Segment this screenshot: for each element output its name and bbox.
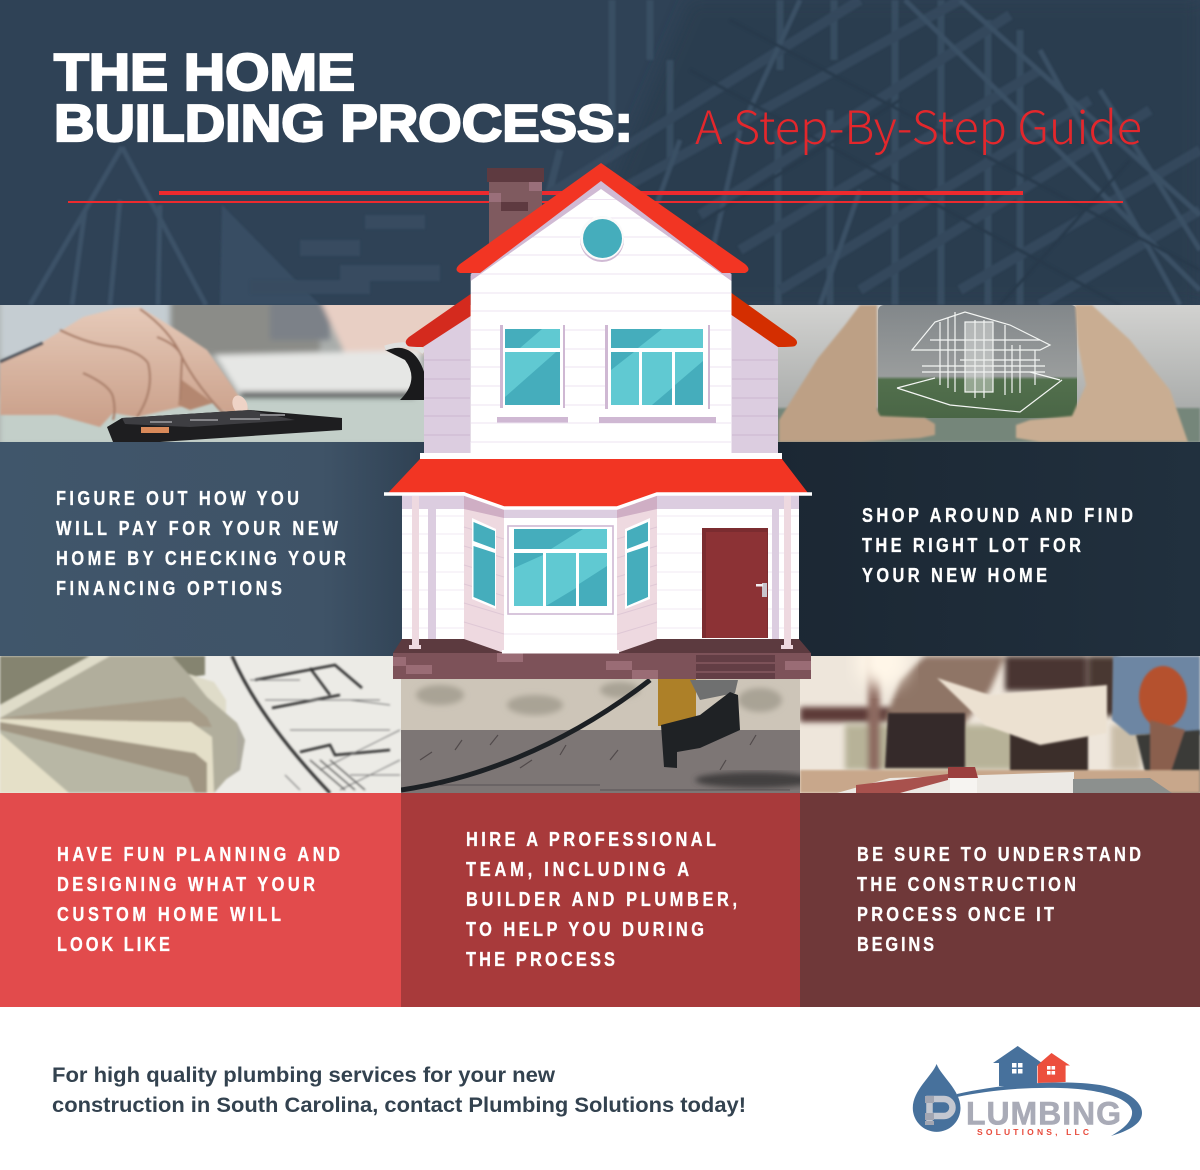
- side wings: [424, 314, 778, 453]
- step text: find the lot: SHOP AROUND AND FIND: [862, 503, 1133, 526]
- step text: hire a team: BUILDER AND PLUMBER,: [466, 887, 737, 910]
- icon: red house: [1037, 1053, 1070, 1083]
- step text: find the lot: [862, 503, 1133, 586]
- subtitle: A Step-By-Step Guide: [695, 92, 1142, 158]
- lower wall: [402, 493, 799, 640]
- bay side windows: [472, 518, 650, 609]
- panel background: [0, 442, 430, 656]
- step text: planning: CUSTOM HOME WILL: [57, 902, 281, 925]
- step text: hire a team: THE PROCESS: [466, 947, 615, 970]
- wordmark: LUMBING: [966, 1096, 1121, 1132]
- house illustration: [384, 163, 812, 679]
- step text: financing: FINANCING OPTIONS: [56, 576, 282, 599]
- upper right window: [605, 325, 710, 409]
- step text: financing: HOME BY CHECKING YOUR: [56, 546, 346, 569]
- side roofs: [406, 293, 797, 347]
- title: THE HOME: [54, 44, 355, 102]
- round window: [580, 216, 624, 262]
- photo: hand on calculator: [0, 300, 480, 445]
- wordmark tagline: SOLUTIONS, LLC: [977, 1127, 1089, 1137]
- header background with house framing: [0, 0, 1200, 305]
- chimney: [487, 168, 544, 252]
- steps: [696, 655, 775, 679]
- step text: financing: WILL PAY FOR YOUR NEW: [56, 516, 339, 539]
- panel background: [401, 793, 800, 1007]
- door: [702, 528, 768, 638]
- step text: hire a team: HIRE A PROFESSIONAL: [466, 827, 716, 850]
- step text: find the lot: THE RIGHT LOT FOR: [862, 533, 1081, 556]
- panel background: [775, 442, 1200, 656]
- step text: understand: PROCESS ONCE IT: [857, 902, 1054, 925]
- swoosh: [957, 1082, 1142, 1136]
- step text: understand: [857, 842, 1141, 955]
- step text: financing: [56, 486, 346, 599]
- step text: understand: BE SURE TO UNDERSTAND: [857, 842, 1141, 865]
- gable trim: [471, 180, 732, 281]
- photo: hands framing building plan: [725, 305, 1200, 442]
- step text: find the lot: YOUR NEW HOME: [862, 563, 1047, 586]
- step text: planning: [57, 842, 340, 955]
- panel background: [0, 793, 401, 1007]
- logo: Plumbing Solutions: [913, 1046, 1142, 1137]
- step text: understand: BEGINS: [857, 932, 934, 955]
- step text: planning: LOOK LIKE: [57, 932, 170, 955]
- step text: planning: HAVE FUN PLANNING AND: [57, 842, 340, 865]
- icon: blue house: [993, 1046, 1042, 1086]
- gable roof: [456, 163, 748, 273]
- panel background: [800, 793, 1200, 1007]
- panel: understand the process: [800, 636, 1200, 1007]
- step text: financing: FIGURE OUT HOW YOU: [56, 486, 299, 509]
- footer call to action: construction in South Carolina, contact Plumbing Solutions today!: [52, 1094, 746, 1117]
- photo: team reviewing plans: [800, 656, 1200, 793]
- window sills: [497, 417, 716, 423]
- step text: hire a team: [466, 827, 737, 970]
- bay center window: [508, 526, 613, 614]
- upper wall: [471, 182, 732, 460]
- foundation: [393, 653, 811, 679]
- porch columns: [409, 496, 793, 649]
- back posts: [428, 509, 779, 639]
- photo: material swatches and blueprint: [0, 656, 401, 793]
- step text: understand: THE CONSTRUCTION: [857, 872, 1076, 895]
- footer call to action: For high quality plumbing services for your new: [52, 1064, 556, 1087]
- panel: planning and designing: [0, 656, 401, 1007]
- panel: find the lot: [725, 305, 1200, 656]
- header rule lines: [68, 191, 1123, 203]
- step text: hire a team: TEAM, INCLUDING A: [466, 857, 689, 880]
- photo: nail gun on roof shingles: [401, 679, 800, 793]
- footer call to action: [52, 1064, 746, 1117]
- step text: hire a team: TO HELP YOU DURING: [466, 917, 704, 940]
- step text: planning: DESIGNING WHAT YOUR: [57, 872, 315, 895]
- icon: water drop with pipe P: [913, 1064, 960, 1132]
- bay window body: [464, 493, 657, 654]
- panel: financing: [0, 300, 480, 656]
- footer background: [0, 1007, 1200, 1170]
- panel: hire a team: [401, 656, 815, 1007]
- upper left window: [500, 325, 565, 408]
- title: [54, 44, 633, 153]
- awning roof: [384, 453, 812, 508]
- title: BUILDING PROCESS:: [54, 95, 633, 153]
- porch floor: [393, 639, 811, 653]
